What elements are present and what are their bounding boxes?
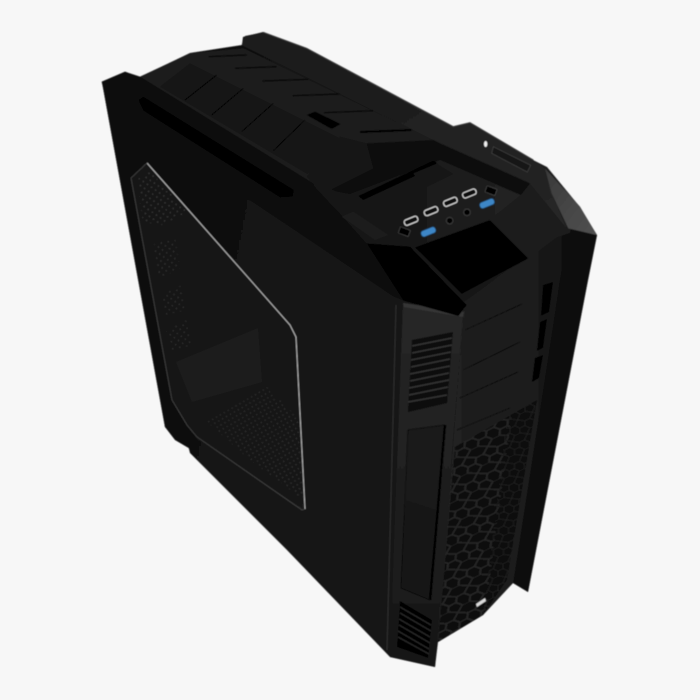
window perforations middle xyxy=(152,238,180,278)
dark left band of side panel xyxy=(102,82,192,450)
window xyxy=(131,163,305,510)
lip small cover xyxy=(313,185,393,243)
right rail xyxy=(513,228,597,592)
lower mesh panel shade xyxy=(401,500,437,600)
right front facet xyxy=(490,195,567,258)
window perforations bottom xyxy=(166,320,191,352)
back strip xyxy=(242,32,567,228)
deck switches xyxy=(398,186,497,237)
case body xyxy=(102,32,597,667)
bottom vent slats xyxy=(398,607,431,654)
drive dock tray xyxy=(360,162,453,211)
column top highlight xyxy=(403,303,464,317)
power supply shroud inside window xyxy=(176,328,262,402)
window perforations lower xyxy=(162,285,186,315)
bays and grille xyxy=(438,232,572,642)
handle slot xyxy=(138,97,294,197)
back strip highlight xyxy=(263,32,533,160)
lower front black facet xyxy=(415,220,528,294)
basement perforated floor xyxy=(205,385,304,500)
ratchet latch xyxy=(307,112,341,129)
angled wedge beside vents xyxy=(310,138,373,190)
honeycomb pattern xyxy=(438,414,512,642)
right corner facet xyxy=(545,168,597,235)
mesh filter panel xyxy=(401,425,445,600)
top plate ribs xyxy=(208,55,412,132)
window highlight edge xyxy=(147,163,305,509)
mesh panel thin outline xyxy=(401,425,445,600)
side panel front seam xyxy=(387,305,396,650)
drive bay dividers xyxy=(457,304,522,430)
logo mark xyxy=(476,598,486,607)
window perforations top xyxy=(137,170,187,225)
silhouette and side panel xyxy=(102,32,597,667)
front column xyxy=(390,303,464,667)
top section xyxy=(102,32,597,316)
audio jacks xyxy=(446,209,470,224)
honeycomb shadow band xyxy=(483,400,537,615)
side panel top lip xyxy=(102,72,467,316)
honeycomb grille xyxy=(438,400,537,642)
port deck xyxy=(350,160,521,247)
mesh panel dark right edge xyxy=(430,425,445,600)
dark wedge above ports xyxy=(330,140,530,195)
roof vent panel xyxy=(160,63,342,174)
bay side slots xyxy=(532,282,553,382)
USB ports xyxy=(404,188,477,226)
upper vent xyxy=(408,332,453,412)
bottom vent xyxy=(397,601,432,658)
lip black corner xyxy=(367,243,467,316)
power LED xyxy=(484,141,487,147)
blue USB 3 ports xyxy=(420,198,495,238)
roof vent dividers xyxy=(185,75,305,151)
top plate xyxy=(140,48,433,183)
lip cover panel xyxy=(342,212,388,240)
upper vent slats xyxy=(408,338,452,402)
drive dock slot xyxy=(358,161,437,200)
power button xyxy=(492,147,531,172)
window faint edge xyxy=(131,163,305,510)
